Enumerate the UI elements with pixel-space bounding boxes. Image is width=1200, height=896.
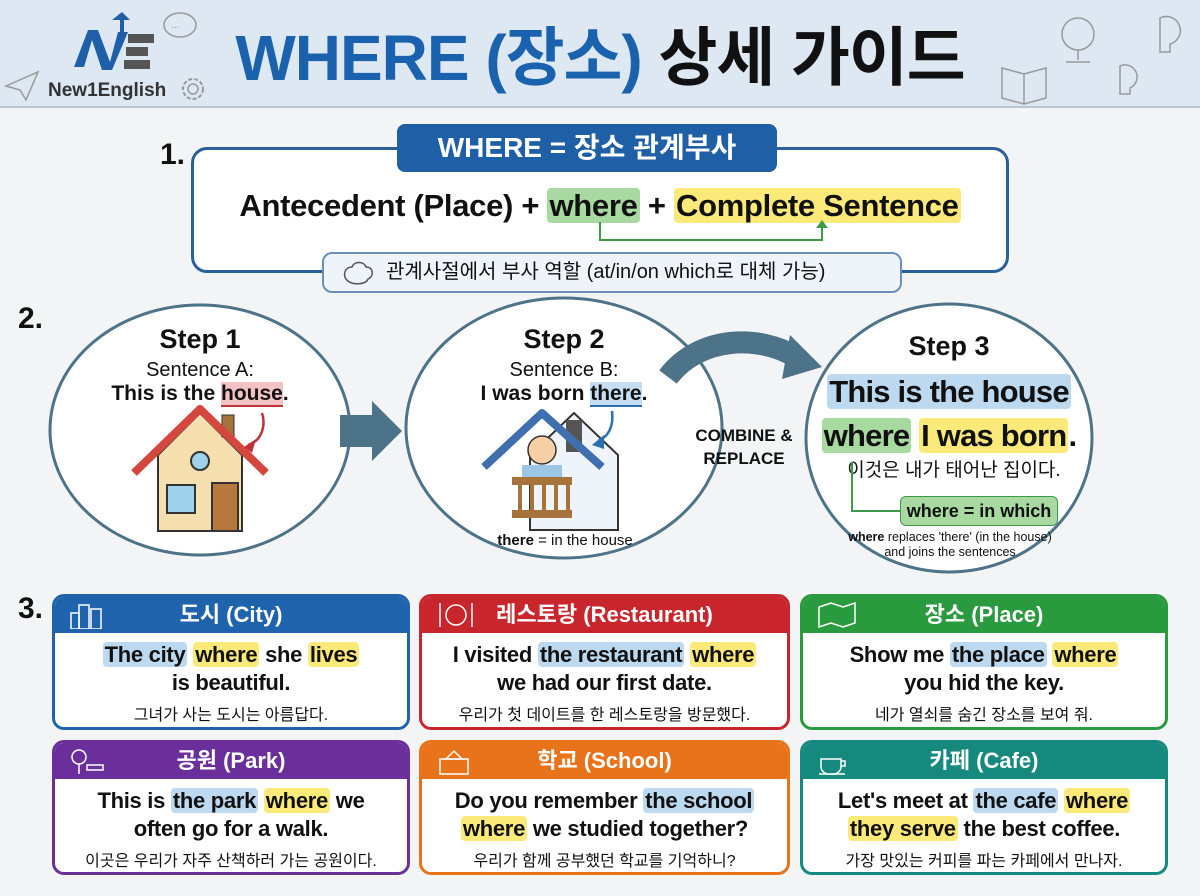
step diagram xyxy=(48,296,1094,574)
card: park: 공원 (Park) xyxy=(177,748,285,773)
step 1 circle xyxy=(50,305,350,555)
card: school xyxy=(419,740,790,875)
caption: there = in the house: there = in the house xyxy=(497,532,633,549)
step 2 text xyxy=(481,324,647,407)
card: park: often go for a walk. xyxy=(134,816,328,841)
card: place: Show me the place where xyxy=(850,642,1116,667)
where = in which xyxy=(851,462,901,512)
card: cafe: 카페 (Cafe) xyxy=(930,748,1038,773)
card: city: 도시 (City) xyxy=(180,602,282,627)
icon: paper plane xyxy=(4,70,40,102)
card: cafe: 가장 맛있는 커피를 파는 카페에서 만나자. xyxy=(846,853,1122,870)
icon: house xyxy=(134,409,266,531)
card: park xyxy=(52,740,410,875)
logo: New1English xyxy=(48,80,166,101)
arrow: curved combine xyxy=(668,342,796,377)
card: city: is beautiful. xyxy=(172,670,290,695)
note pill xyxy=(322,252,902,293)
step 1 text xyxy=(111,324,289,407)
panel: formula xyxy=(191,147,1009,273)
header band xyxy=(0,0,1200,108)
step 2 text: Sentence B: xyxy=(510,359,618,381)
icon: house with baby xyxy=(484,411,618,530)
step 3 content: 이것은 내가 태어난 집이다. xyxy=(847,460,1061,481)
section 1 number: 1. xyxy=(160,138,185,171)
card: city xyxy=(52,594,410,730)
section 2 number: 2. xyxy=(18,302,43,335)
card: restaurant: we had our first date. xyxy=(497,670,712,695)
icon: gear xyxy=(182,78,204,100)
icons: decorative right xyxy=(1001,16,1182,105)
card: place: 네가 열쇠를 숨긴 장소를 보여 줘. xyxy=(875,707,1093,724)
card: city: The city where she lives xyxy=(105,642,357,667)
tab label xyxy=(397,124,777,172)
card: cafe xyxy=(800,740,1168,875)
card: restaurant: 레스토랑 (Restaurant) xyxy=(496,602,713,627)
step 2 text: Step 2 xyxy=(523,324,605,354)
combine label xyxy=(695,426,793,468)
arrow: where to sentence xyxy=(599,220,828,241)
caption step 3: where replaces 'there' (in the house) and joins the sentences xyxy=(848,530,1052,559)
card: place: you hid the key. xyxy=(904,670,1064,695)
card: park: This is the park where we xyxy=(97,788,365,813)
icon: brain xyxy=(344,262,373,284)
title: WHERE (장소) 상세 가이드 xyxy=(235,22,965,94)
combine label: COMBINE & xyxy=(695,426,793,445)
step 3 circle xyxy=(806,304,1092,572)
card: cafe: Let's meet at the cafe where xyxy=(838,788,1128,813)
arrow: step1 to step2 xyxy=(340,401,402,461)
icon: chat bubble xyxy=(163,12,197,38)
card: place xyxy=(800,594,1168,730)
icon: chat bubble: ... xyxy=(171,20,179,31)
logo xyxy=(48,12,166,101)
step 3 content: Step 3 xyxy=(908,331,990,361)
tab label: WHERE = 장소 관계부사 xyxy=(438,132,736,163)
step 3 content xyxy=(822,331,1076,481)
card: school: 우리가 함께 공부했던 학교를 기억하니? xyxy=(473,853,736,870)
combine label: REPLACE xyxy=(703,449,785,468)
step 1 text: Sentence A: xyxy=(146,359,254,381)
card: restaurant: I visited the restaurant where xyxy=(453,642,754,667)
note pill: 관계사절에서 부사 역할 (at/in/on which로 대체 가능) xyxy=(386,261,825,283)
text: where = in which xyxy=(907,501,1051,521)
card: place: 장소 (Place) xyxy=(925,602,1043,627)
step 2 text: I was born there. xyxy=(481,382,647,405)
card: school: Do you remember the school xyxy=(455,788,752,813)
step 2 circle xyxy=(406,298,722,558)
card: cafe: they serve the best coffee. xyxy=(850,816,1120,841)
card: restaurant: 우리가 첫 데이트를 한 레스토랑을 방문했다. xyxy=(459,707,750,724)
step 1 text: Step 1 xyxy=(159,324,241,354)
card: school: 학교 (School) xyxy=(537,748,672,773)
section 3 number: 3. xyxy=(18,592,43,625)
card: school: where we studied together? xyxy=(463,816,748,841)
card: park: 이곳은 우리가 자주 산책하러 가는 공원이다. xyxy=(85,853,377,870)
formula line: Antecedent (Place) + where + Complete Sentence xyxy=(239,188,959,223)
step 3 content: This is the house xyxy=(829,374,1069,409)
card: restaurant xyxy=(419,594,790,730)
card: city: 그녀가 사는 도시는 아름답다. xyxy=(134,707,328,724)
step 3 content: where I was born. xyxy=(824,418,1076,453)
step 1 text: This is the house. xyxy=(111,382,289,405)
